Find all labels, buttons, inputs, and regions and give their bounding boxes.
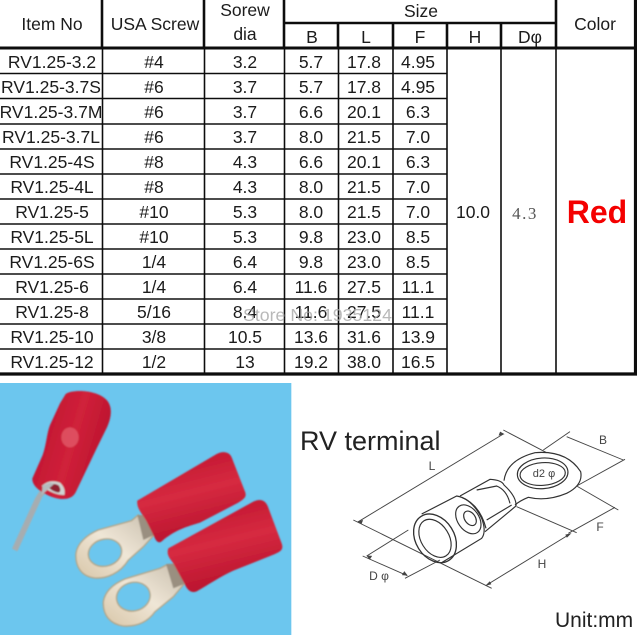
unit note: Unit:mm xyxy=(555,609,633,632)
table data rows: 5.7 xyxy=(299,77,323,97)
table data rows: 5.7 xyxy=(299,52,323,72)
terminal: ring terminal upper xyxy=(76,452,246,578)
table data rows: RV1.25-4L xyxy=(10,177,94,197)
dimension label: D phi: D φ xyxy=(369,569,389,583)
table header row: Item No xyxy=(21,14,83,34)
table data rows: 16.5 xyxy=(401,352,435,372)
table data rows: 5.3 xyxy=(233,227,257,247)
dimension label: H: H xyxy=(538,557,546,571)
merged cell: D phi value: 4.3 xyxy=(512,204,538,223)
table data rows: 8.0 xyxy=(299,202,323,222)
table data rows: RV1.25-8 xyxy=(15,302,89,322)
table data rows: 4.3 xyxy=(233,152,257,172)
table data rows: 8.0 xyxy=(299,127,323,147)
table header row: USA Screw xyxy=(111,14,200,34)
table data rows: 1/2 xyxy=(142,352,166,372)
table data rows: 3.7 xyxy=(233,77,257,97)
table data rows: 4.3 xyxy=(233,177,257,197)
table data rows: 23.0 xyxy=(347,227,381,247)
table header row: B xyxy=(306,27,318,47)
table data rows: 3.7 xyxy=(233,127,257,147)
table grid lines xyxy=(0,0,637,374)
table data rows: #8 xyxy=(144,177,164,197)
table header row xyxy=(21,0,616,47)
table data rows: 13.9 xyxy=(401,327,435,347)
table data rows: 3.2 xyxy=(233,52,257,72)
terminal: ring terminal lower xyxy=(103,500,282,626)
table data rows: #6 xyxy=(144,77,164,97)
table data rows: RV1.25-3.2 xyxy=(8,52,96,72)
table data rows: RV1.25-5L xyxy=(10,227,94,247)
dimension lines xyxy=(353,430,625,588)
table data rows: #4 xyxy=(144,52,164,72)
table data rows: 20.1 xyxy=(347,102,381,122)
table data rows: RV1.25-5 xyxy=(15,202,89,222)
table data rows: 10.5 xyxy=(228,327,262,347)
table data rows: 17.8 xyxy=(347,77,381,97)
table data rows: 6.4 xyxy=(233,277,257,297)
table data rows: 17.8 xyxy=(347,52,381,72)
table data rows: 6.6 xyxy=(299,102,323,122)
table header row: L xyxy=(361,27,371,47)
table data rows: 11.1 xyxy=(402,302,434,322)
barrel body xyxy=(460,479,516,532)
table data rows: 31.6 xyxy=(347,327,381,347)
table data rows: 21.5 xyxy=(347,177,381,197)
table data rows: 6.3 xyxy=(406,102,430,122)
table data rows: 21.5 xyxy=(347,127,381,147)
table data rows: 6.3 xyxy=(406,152,430,172)
drawing: terminal outline with dimension lines xyxy=(353,430,625,588)
table data rows: RV1.25-10 xyxy=(10,327,94,347)
table data rows: 7.0 xyxy=(406,127,430,147)
table data rows: 5/16 xyxy=(137,302,171,322)
photo background xyxy=(0,383,291,635)
dimension label: B: B xyxy=(599,433,607,447)
dimension label: F: F xyxy=(596,520,604,534)
table data rows: 11.1 xyxy=(402,277,434,297)
table data rows: 38.0 xyxy=(347,352,381,372)
table data rows: 20.1 xyxy=(347,152,381,172)
table header row: Sorew xyxy=(220,0,270,20)
table data rows: 5.3 xyxy=(233,202,257,222)
terminal: bent pin terminal xyxy=(12,391,111,551)
table data rows: 6.6 xyxy=(299,152,323,172)
table data rows: 3/8 xyxy=(142,327,166,347)
table data rows: 13.6 xyxy=(294,327,328,347)
table header row: H xyxy=(469,27,481,47)
table data rows: RV1.25-4S xyxy=(9,152,95,172)
table data rows: 21.5 xyxy=(347,202,381,222)
panel: RV terminal dimension diagram xyxy=(300,426,633,632)
dimension label: L: L xyxy=(429,459,436,473)
table data rows: 8.4 xyxy=(233,302,257,322)
table data rows: 19.2 xyxy=(294,352,328,372)
table data rows: #8 xyxy=(144,152,164,172)
table data rows: 27.5 xyxy=(347,277,381,297)
table header row: Size xyxy=(404,1,438,21)
sleeve xyxy=(422,496,484,563)
table data rows: 1/4 xyxy=(142,252,166,272)
table data rows: RV1.25-12 xyxy=(10,352,94,372)
table data rows xyxy=(0,52,435,372)
table data rows: 6.4 xyxy=(233,252,257,272)
table data rows: 4.95 xyxy=(401,77,435,97)
table data rows: #6 xyxy=(144,127,164,147)
dimension label: d2 phi: d2 φ xyxy=(533,468,555,480)
table data rows: #6 xyxy=(144,102,164,122)
table data rows: #10 xyxy=(139,202,169,222)
table data rows: 9.8 xyxy=(299,227,323,247)
table data rows: 9.8 xyxy=(299,252,323,272)
ring end xyxy=(504,452,581,505)
table data rows: #10 xyxy=(139,227,169,247)
table header row: dia xyxy=(233,24,257,44)
open end xyxy=(405,506,465,571)
table data rows: RV1.25-6 xyxy=(15,277,89,297)
panel: specification table xyxy=(0,0,637,374)
table data rows: 13 xyxy=(235,352,255,372)
table data rows: RV1.25-3.7S xyxy=(1,77,101,97)
table data rows: 8.0 xyxy=(299,177,323,197)
table data rows: 27.5 xyxy=(347,302,381,322)
table header row: F xyxy=(415,27,425,47)
table data rows: RV1.25-6S xyxy=(9,252,95,272)
table data rows: 7.0 xyxy=(406,202,430,222)
table data rows: 1/4 xyxy=(142,277,166,297)
table header row: Dφ xyxy=(518,27,542,47)
merged cell: H value: 10.0 xyxy=(456,202,490,222)
table data rows: 11.6 xyxy=(295,277,327,297)
table data rows: 23.0 xyxy=(347,252,381,272)
table data rows: 8.5 xyxy=(406,252,430,272)
table data rows: 7.0 xyxy=(406,177,430,197)
table data rows: RV1.25-3.7M xyxy=(0,102,102,122)
table data rows: RV1.25-3.7L xyxy=(2,127,100,147)
table data rows: 11.6 xyxy=(295,302,327,322)
table data rows: 3.7 xyxy=(233,102,257,122)
merged cell: colour Red: Red xyxy=(567,194,627,230)
table data rows: 4.95 xyxy=(401,52,435,72)
table data rows: 8.5 xyxy=(406,227,430,247)
table header row: Color xyxy=(574,14,616,34)
heading: RV terminal: RV terminal xyxy=(300,426,441,456)
panel: product photo of red ring terminals xyxy=(0,383,291,635)
watermark: store number: Store No: 1935124 xyxy=(243,305,392,325)
